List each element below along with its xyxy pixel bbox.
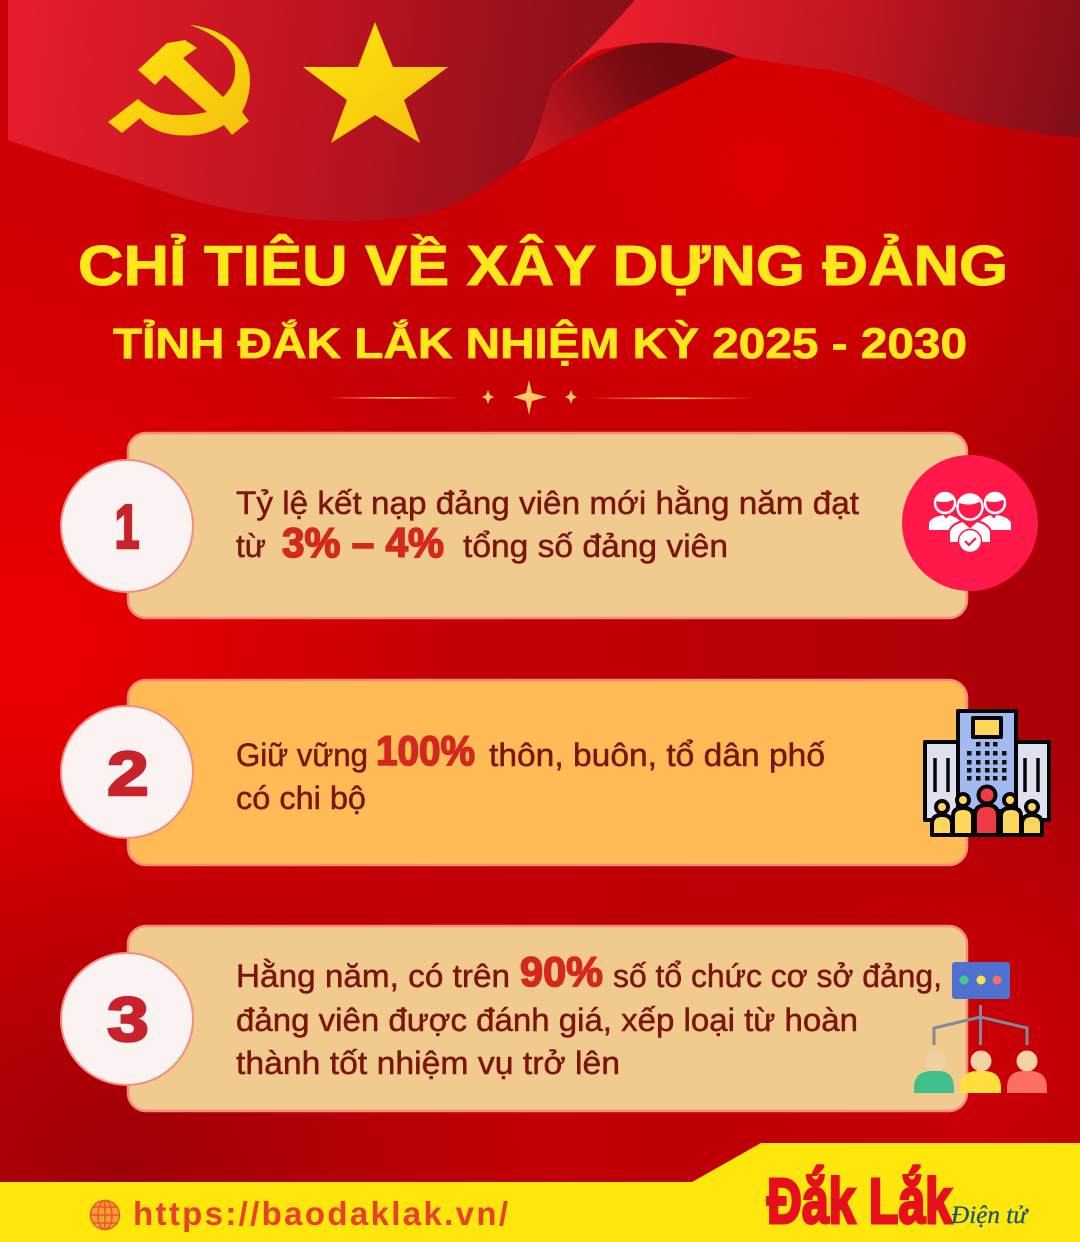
subtitle: TỈNH ĐẮK LẮK NHIỆM KỲ 2025 - 2030 xyxy=(113,319,967,368)
card 2 background xyxy=(128,680,967,865)
number badge 3: 3 xyxy=(107,985,149,1055)
target 3 text: số tổ chức cơ sở đảng, xyxy=(613,958,942,994)
logo: Đắk Lắk Điện tử: Điện tử xyxy=(950,1202,1029,1229)
target 3 text: đảng viên được đánh giá, xếp loại từ hoàn xyxy=(236,1002,858,1038)
target 2 text: Giữ vững xyxy=(236,737,368,773)
target 2 text xyxy=(236,727,825,816)
number badge 2: 2 xyxy=(107,739,149,809)
number badge 1: 1 xyxy=(115,493,139,562)
icon: buildings and residents xyxy=(925,711,1049,835)
number badge 2 xyxy=(61,706,193,838)
icon: yellow star xyxy=(303,22,448,143)
target 1 text xyxy=(236,485,859,566)
target 1 text: 3% – 4% xyxy=(282,519,444,566)
target 3 text: thành tốt nhiệm vụ trở lên xyxy=(236,1045,620,1081)
target 1 text: từ xyxy=(236,528,266,564)
sparkle divider xyxy=(328,380,755,415)
title: CHỈ TIÊU VỀ XÂY DỰNG ĐẢNG xyxy=(78,233,1008,298)
icon: globe xyxy=(90,1200,120,1230)
logo: Đắk Lắk Điện tử: Đắk Lắk xyxy=(767,1165,952,1237)
card 3 background xyxy=(128,926,967,1111)
panel: target 1 xyxy=(61,433,1038,618)
icon: organisation chart xyxy=(914,962,1047,1093)
footer band xyxy=(0,1143,1080,1242)
target 2 text: có chi bộ xyxy=(236,780,366,816)
target 3 text: Hằng năm, có trên xyxy=(236,958,510,994)
target 2 text: thôn, buôn, tổ dân phố xyxy=(489,737,825,773)
target 1 text: tổng số đảng viên xyxy=(463,528,728,564)
number badge 3 xyxy=(61,953,193,1085)
target 1 text: Tỷ lệ kết nạp đảng viên mới hằng năm đạt xyxy=(236,485,859,521)
icon: hammer and sickle xyxy=(108,25,250,136)
target 2 text: 100% xyxy=(376,727,475,774)
icon: party members group xyxy=(902,455,1038,591)
target 3 text xyxy=(236,948,942,1081)
number badge 1 xyxy=(61,460,193,592)
waving flag banner xyxy=(8,0,1080,221)
panel: target 2 xyxy=(61,680,1049,865)
website address: https://baodaklak.vn/ xyxy=(133,1195,508,1232)
card 1 background xyxy=(128,433,967,618)
panel: target 3 xyxy=(61,926,1047,1111)
target 3 text: 90% xyxy=(520,948,603,995)
